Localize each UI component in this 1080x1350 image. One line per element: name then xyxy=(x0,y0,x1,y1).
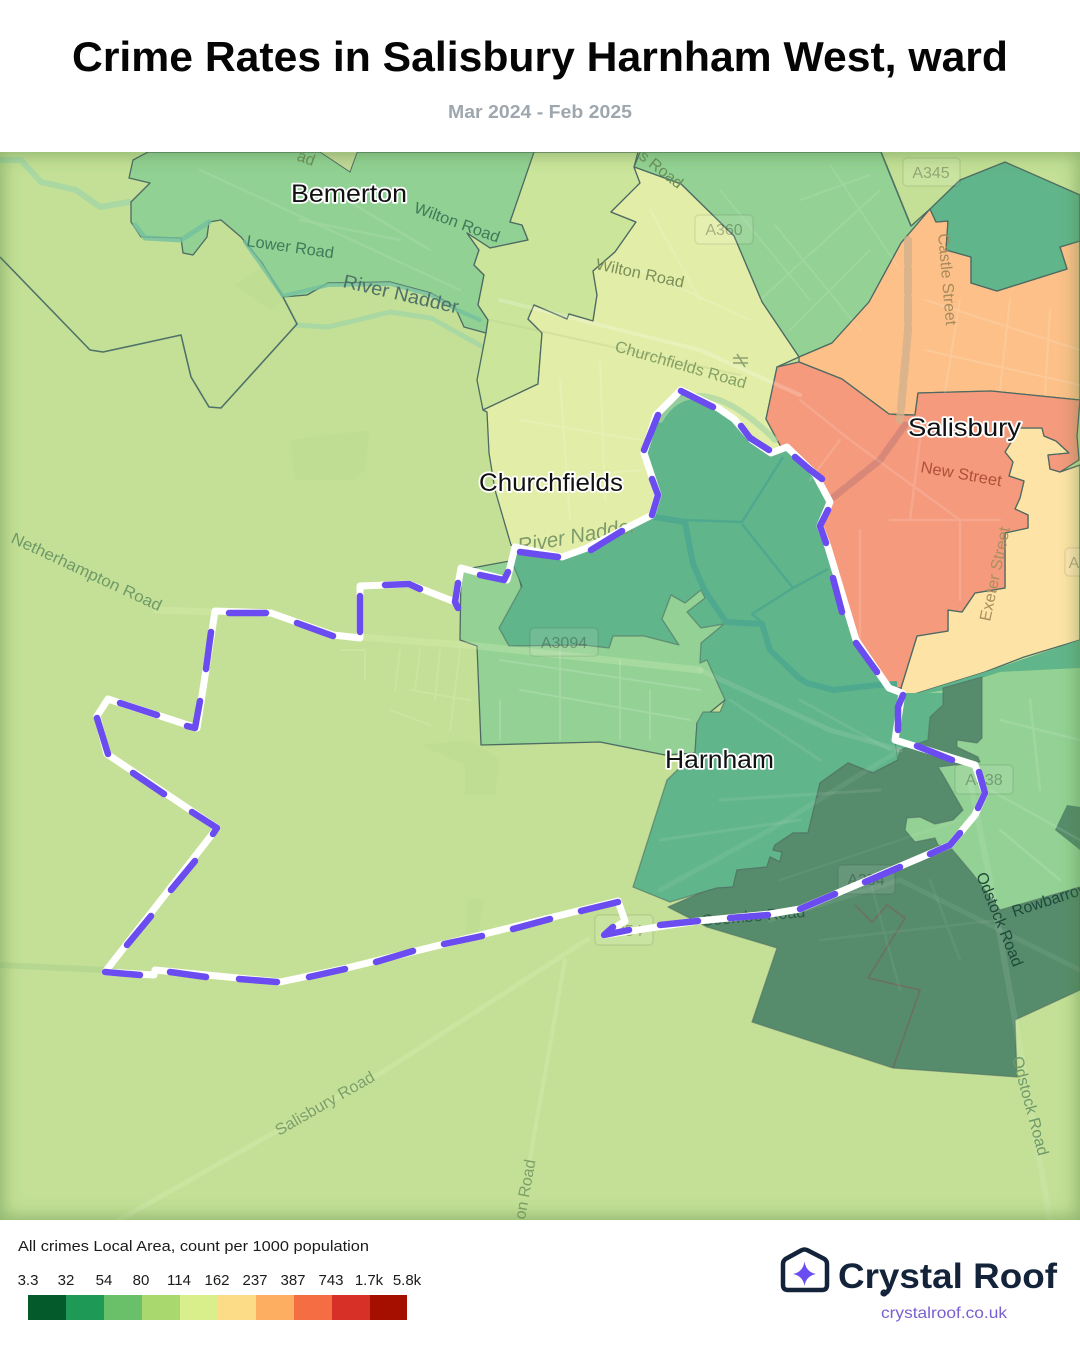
top cutout in Bemerton xyxy=(320,152,358,173)
road shields: A xyxy=(1069,555,1080,572)
road shields: A354 xyxy=(847,872,885,889)
logo: Crystal Roof xyxy=(783,1250,1057,1322)
faint field patches xyxy=(235,265,500,935)
road labels: Salisbury Road xyxy=(272,1069,378,1139)
road shields xyxy=(530,158,1080,945)
boundary purple dashes xyxy=(97,391,985,982)
ward: Harnham south dark green xyxy=(668,677,1080,1077)
road labels: Netherhampton Road xyxy=(8,530,164,615)
ward: small dark patch right edge xyxy=(1055,805,1080,850)
road shields: A338 xyxy=(965,772,1003,789)
legend scale labels: 743 xyxy=(318,1272,344,1289)
legend scale labels: 114 xyxy=(167,1272,191,1289)
ward: central pale green xyxy=(467,152,640,410)
road labels: ad xyxy=(295,148,317,170)
rural river xyxy=(0,160,483,347)
legend scale labels: 32 xyxy=(58,1272,74,1289)
legend xyxy=(18,1238,422,1320)
icon: house with star xyxy=(783,1250,827,1290)
road labels: Odstock Road xyxy=(972,870,1026,969)
legend scale labels xyxy=(18,1272,422,1289)
ward: far-right teal strip xyxy=(918,640,1080,693)
Bemerton river edge xyxy=(135,222,480,320)
wordmark descender ring xyxy=(882,1290,886,1296)
ward: Harnham teal green xyxy=(499,390,902,902)
choropleth map xyxy=(0,146,1080,1226)
place label: Bemerton: Bemerton xyxy=(291,180,407,208)
road shields: A345 xyxy=(912,165,950,182)
website link: crystalroof.co.uk xyxy=(881,1305,1008,1322)
road labels: River Nadder xyxy=(341,271,461,319)
road labels: Castle Street xyxy=(934,233,959,327)
place label: Churchfields: Churchfields xyxy=(479,469,623,497)
legend scale labels: 54 xyxy=(96,1272,112,1289)
road labels: New Street xyxy=(919,459,1004,490)
ward: Bemerton green xyxy=(129,152,534,333)
ward: city centre red xyxy=(766,362,1080,688)
outline: west rural boundary xyxy=(0,257,297,408)
road labels: on Road xyxy=(512,1158,539,1221)
title: Crime Rates in Salisbury Harnham West, ward xyxy=(72,33,1008,80)
road labels xyxy=(8,148,1080,1221)
ward: Salisbury north orange xyxy=(799,209,1080,415)
road labels: Exeter Street xyxy=(977,525,1014,623)
road labels: Wilton Road xyxy=(594,256,686,292)
boundary white casing xyxy=(97,390,985,982)
map base: surrounding rural area xyxy=(0,152,1080,1220)
legend scale labels: 387 xyxy=(280,1272,306,1289)
river and roads xyxy=(0,165,1080,1220)
road labels: Odstock Road xyxy=(1008,1055,1051,1158)
road labels: Churchfields Road xyxy=(613,339,748,392)
road labels: River Nadder xyxy=(516,514,639,558)
wordmark: Crystal Roof xyxy=(838,1257,1057,1296)
legend scale labels: 237 xyxy=(242,1272,268,1289)
place label: Salisbury: Salisbury xyxy=(908,414,1022,442)
road shields: A354 xyxy=(605,923,643,940)
ward: Churchfields yellow-green xyxy=(483,167,799,557)
legend scale labels: 80 xyxy=(133,1272,149,1289)
road shields: A360 xyxy=(705,222,743,239)
road labels: Coombe Road xyxy=(701,904,806,930)
ward: east teal patch xyxy=(896,693,943,757)
inner ward lines in dark area xyxy=(855,905,920,1068)
road labels: s Road xyxy=(636,148,686,192)
ward: east medium green xyxy=(905,668,1080,910)
legend scale labels: 5.8k xyxy=(393,1272,422,1289)
legend colour ramp xyxy=(28,1295,407,1320)
road labels: Wilton Road xyxy=(412,200,502,247)
road labels: Lower Road xyxy=(245,233,335,262)
outline: north-east rail line xyxy=(881,152,911,226)
subtitle: date range: Mar 2024 - Feb 2025 xyxy=(448,102,632,122)
legend scale labels: 162 xyxy=(204,1272,230,1289)
ward: west Harnham medium green xyxy=(460,560,730,755)
legend scale labels: 3.3 xyxy=(18,1272,38,1289)
ward: north-east teal xyxy=(930,162,1080,291)
icon: railway station xyxy=(733,354,748,367)
legend title: All crimes Local Area, count per 1000 population xyxy=(18,1238,369,1255)
map edge vignette xyxy=(0,146,1080,1226)
legend scale labels: 1.7k xyxy=(355,1272,384,1289)
ward: Salisbury south cream xyxy=(901,428,1080,697)
ward boundary: Salisbury Harnham West dashed outline xyxy=(97,390,985,982)
inner ward and river lines in Harnham xyxy=(654,457,897,690)
place label: Harnham: Harnham xyxy=(665,746,774,774)
road shields: A3094 xyxy=(541,635,587,652)
ward: upper right medium green xyxy=(634,152,930,357)
